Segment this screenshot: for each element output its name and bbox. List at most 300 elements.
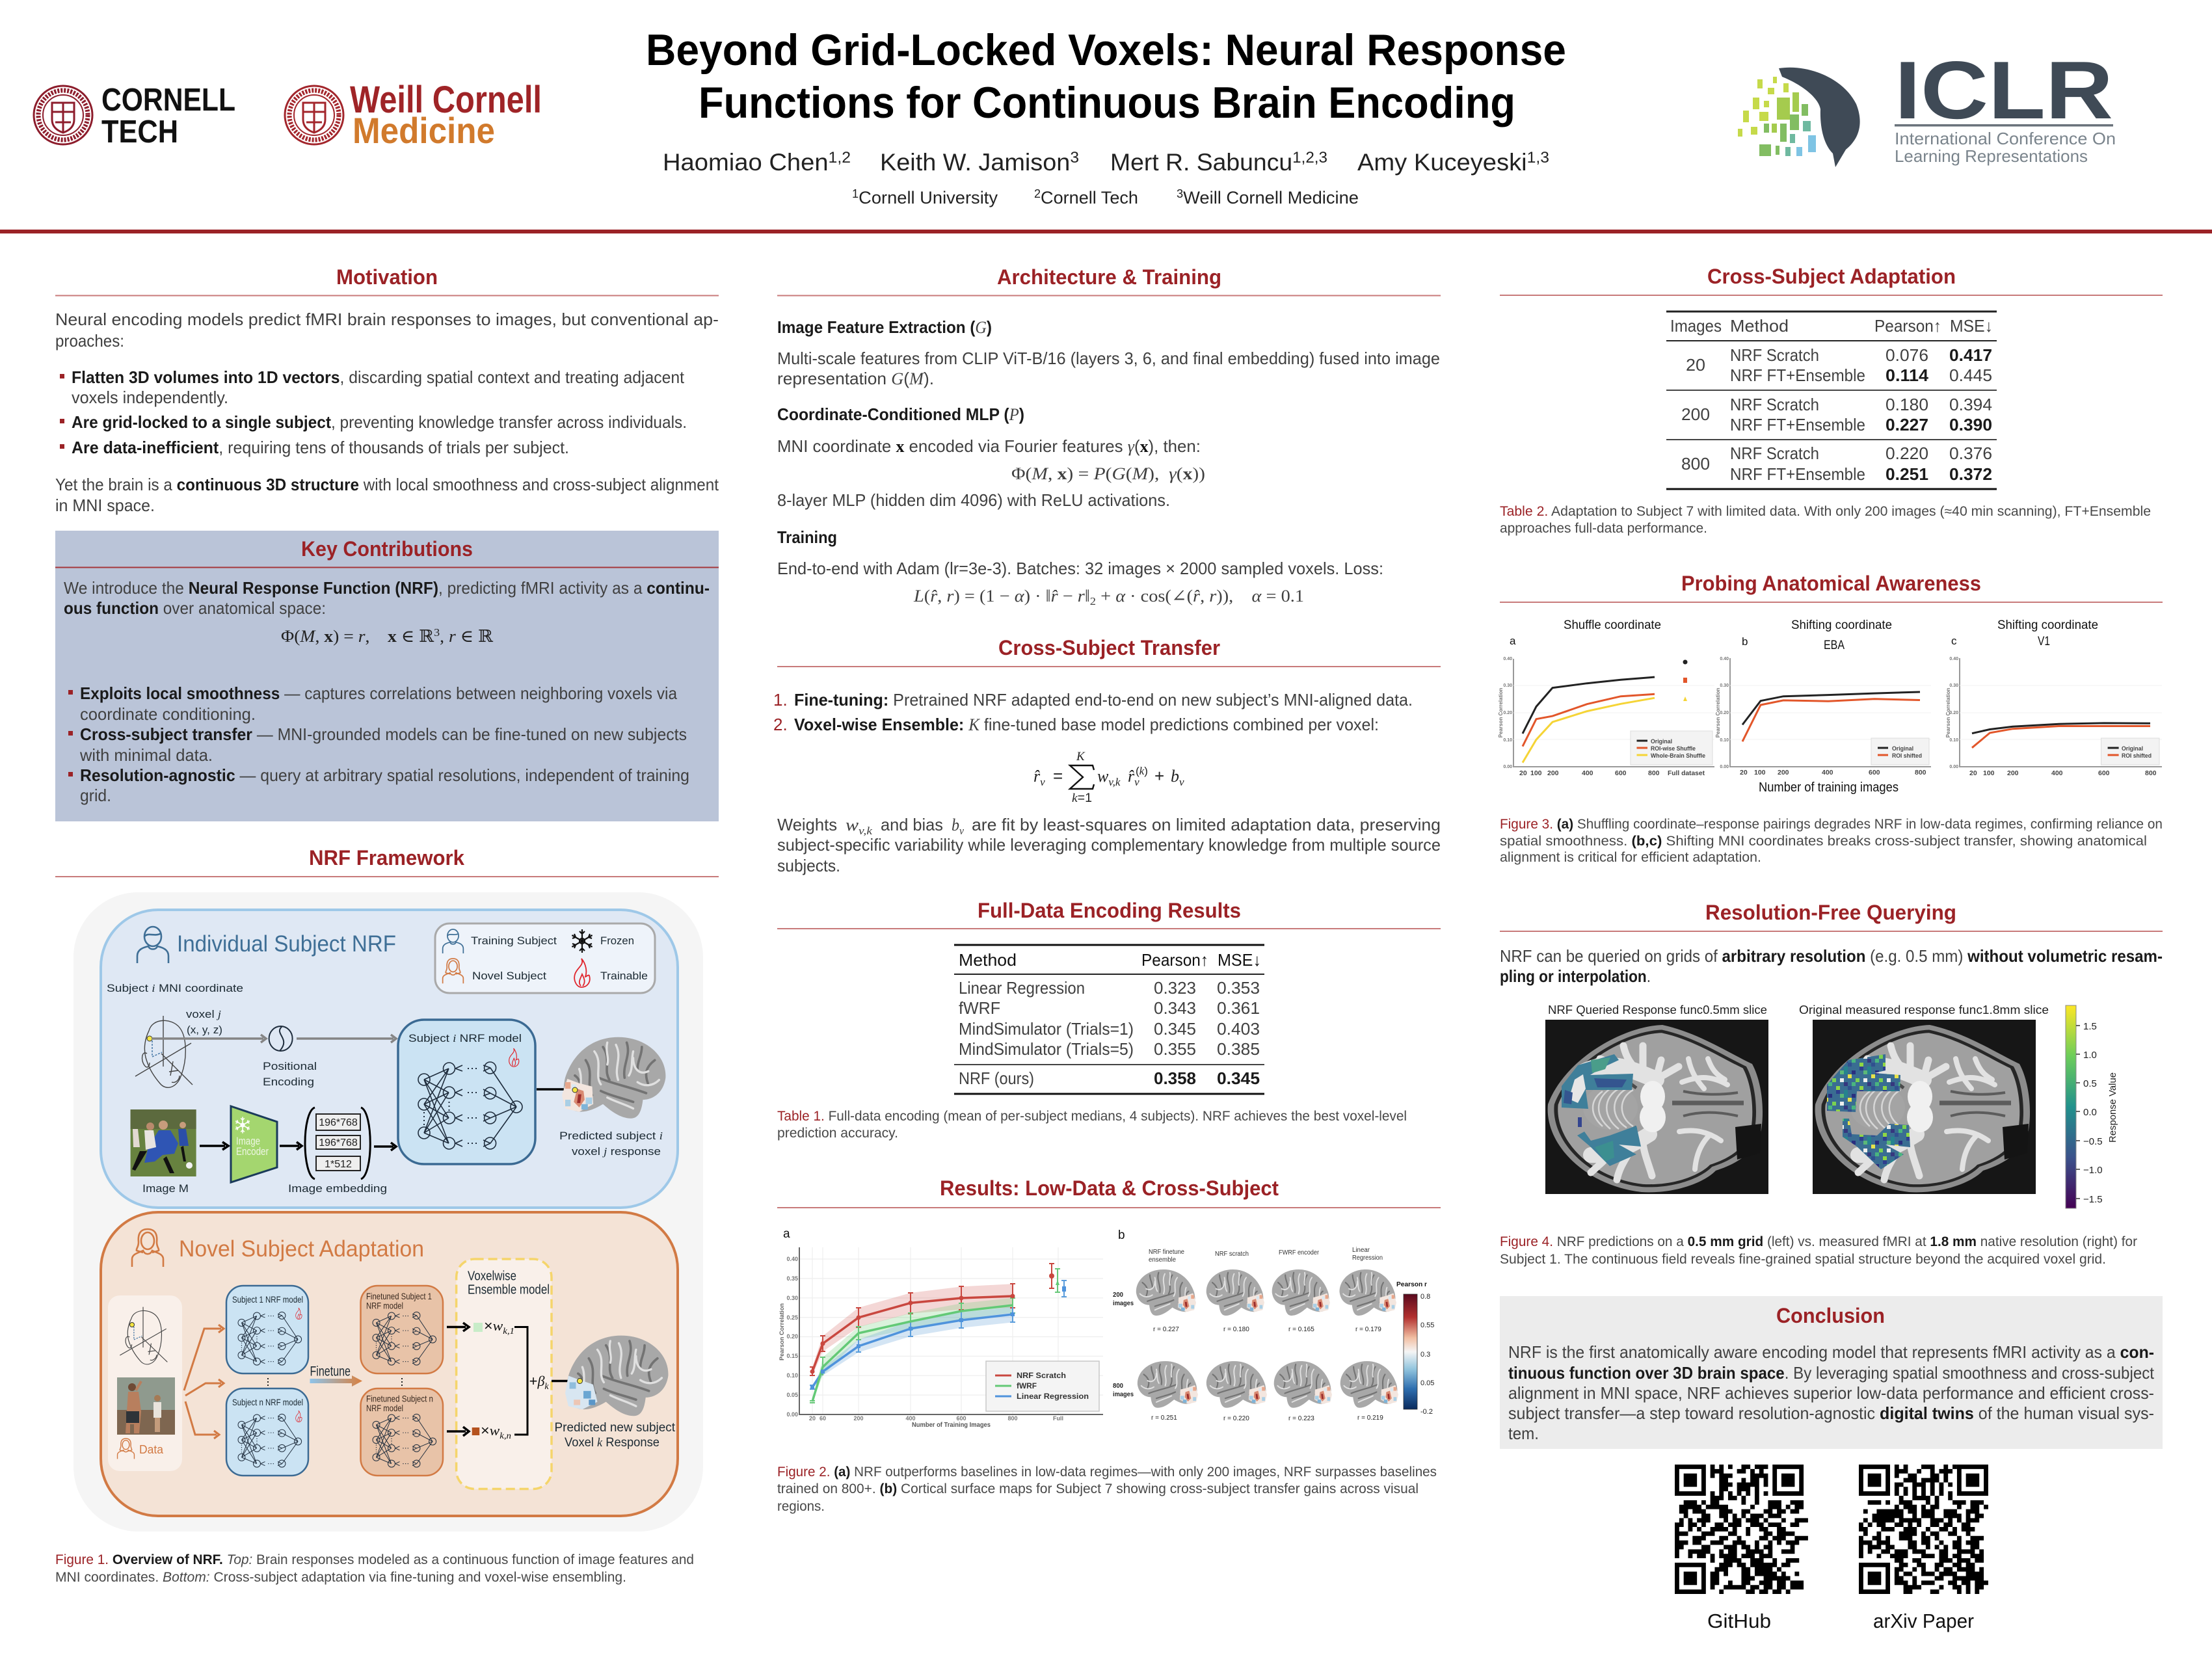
heading: Resolution-Free Querying: Resolution-Free Querying (1705, 901, 1956, 924)
label: predicted response: voxel j response (572, 1145, 661, 1158)
model: finetuned subject n (360, 1388, 443, 1476)
heading: Results: Results: Low-Data & Cross-Subject (940, 1176, 1279, 1200)
text: NRF intro (64, 578, 710, 618)
table 1: 0.385 (1217, 1039, 1260, 1059)
caption: figure 4: Figure 4. NRF predictions on a 0.5 mm grid (left) vs. measured fMRI at 1.8 mm native resolution (right) for (1500, 1234, 2137, 1249)
table 2: NRF Scratch (1730, 345, 1819, 365)
list: contributions: with minimal data. (79, 745, 213, 765)
table 2: NRF FT+Ensemble (1730, 464, 1865, 484)
voxelwise ensemble model: Ensemble model (468, 1282, 550, 1297)
list: contributions: Exploits local smoothness — captures correlations between neighboring voxels via (80, 684, 677, 703)
table 1: MindSimulator (Trials=1) (959, 1019, 1134, 1039)
brain maps: figure 2b: 0.3 (1420, 1351, 1430, 1359)
panel: resolution-free querying (1500, 901, 2163, 1267)
brain maps: figure 2b: FWRF encoder (1279, 1249, 1320, 1256)
icon: image encoder (231, 1106, 277, 1182)
heading: Key Contributions: Key Contributions (301, 537, 473, 561)
label: MNI coordinate: Subject i MNI coordinate (107, 982, 243, 994)
panel: motivation (55, 265, 719, 515)
table 2: 800 (1681, 454, 1710, 473)
text: NRF intro: We introduce the Neural Response Function (NRF), predicting fMRI activity as a continu- (64, 578, 710, 598)
line chart: figure 3a shuffle coordinate: Original (1651, 738, 1672, 745)
icon: image encoder: Encoder (236, 1145, 269, 1158)
caption: table 2: approaches full-data performance. (1500, 521, 1707, 536)
caption: figure 4: Subject 1. The continuous field reveals fine-grained spatial structure beyond the acquired voxel grid. (1500, 1252, 2106, 1267)
table 2: 0.114 (1886, 365, 1929, 385)
label: voxel j (186, 1008, 222, 1036)
legend: Novel Subject (472, 970, 546, 982)
image embedding boxes: 196*768 (319, 1117, 358, 1128)
line chart: figure 3a shuffle coordinate: 600 (1615, 769, 1627, 777)
arrow: image to encoder (200, 1142, 228, 1150)
legend (435, 923, 655, 993)
colorbar: response value: Response Value (2107, 1072, 2118, 1143)
list: contributions: Cross-subject transfer — MNI-grounded models can be fine-tuned on new subjects (80, 724, 687, 744)
text: image feature extraction: Image Feature Extraction (G) (777, 317, 992, 337)
list: limitations: Are data-inefficient, requiring tens of thousands of trials per subject. (72, 438, 569, 457)
text: weights explanation: and bias (881, 815, 943, 834)
formula: voxel-wise ensemble: r̂ (1128, 767, 1134, 786)
table 2: NRF FT+Ensemble (1730, 365, 1865, 385)
text: weights explanation: b (952, 816, 960, 834)
line chart: figure 3c V1: 20 (1969, 769, 1977, 777)
line chart: figure 2a: fWRF (1017, 1381, 1037, 1390)
table 1: NRF (ours) (959, 1068, 1034, 1088)
affiliations: 3 (1177, 187, 1183, 200)
table 1 (954, 944, 1264, 1095)
text: weights explanation (777, 815, 1441, 875)
voxelwise ensemble model: k,n (500, 1431, 511, 1441)
line chart: figure 3c V1: 400 (2051, 769, 2063, 777)
label: voxel j: voxel j (186, 1008, 221, 1020)
line chart: figure 2a: Full (1053, 1415, 1063, 1422)
text: coordinate-conditioned MLP: 8-layer MLP (hidden dim 4096) with ReLU activations. (777, 490, 1170, 510)
table 2: 0.445 (1949, 365, 1992, 385)
line chart: figure 2a: 0.35 (786, 1275, 798, 1282)
formula: voxel-wise ensemble: K (1076, 750, 1086, 763)
diagram: NRF framework figure (73, 892, 703, 1532)
table 2: Pearson↑ (1874, 316, 1941, 336)
line chart: figure 3c V1: 0.30 (1949, 684, 1958, 688)
heading: Cross-Subject Adaptation: Cross-Subject Adaptation (1707, 265, 1956, 288)
image embedding boxes (305, 1108, 370, 1179)
arrow: finetune (310, 1364, 362, 1387)
text: continuous structure (55, 475, 719, 515)
colorbar: response value: −1.5 (2083, 1194, 2103, 1205)
line chart: figure 3b EBA: 0.30 (1720, 684, 1729, 688)
caption: table 2: Table 2. Adaptation to Subject 7 with limited data. With only 200 images (≈40 min scanning), FT+Ensemble (1500, 504, 2151, 519)
voxelwise ensemble model (447, 1259, 552, 1489)
arrow: embedding to model (374, 1143, 396, 1150)
line chart: figure 3a shuffle coordinate: 400 (1582, 769, 1593, 777)
line chart: figure 3b EBA: 400 (1822, 769, 1833, 776)
model: finetuned subject n: NRF model (366, 1403, 403, 1413)
caption: figure 2 (777, 1465, 1437, 1514)
line chart: figure 2a: 0.30 (786, 1295, 798, 1301)
formula: voxel-wise ensemble: v (1179, 776, 1184, 788)
list: transfer steps: 2. (773, 715, 788, 734)
model: finetuned subject 1: NRF model (366, 1301, 403, 1311)
caption: table 2 (1500, 504, 2151, 536)
brain maps: figure 2b: 0.05 (1420, 1379, 1434, 1387)
table 2: 20 (1686, 355, 1705, 375)
line chart: figure 3a shuffle coordinate: 0.30 (1503, 684, 1512, 688)
formula: NRF definition: , (440, 627, 449, 646)
logo: Cornell Tech: CORNELL (101, 83, 235, 118)
caption: figure 2: trained on 800+. (b) Cortical surface maps for Subject 7 showing cross-subject transfer gains across visual (777, 1481, 1419, 1496)
QR code: GitHub: GitHub (1707, 1610, 1771, 1632)
line chart: figure 2a: Number of Training Images (912, 1422, 991, 1429)
table 2: 0.227 (1886, 415, 1928, 434)
line chart: figure 2a: 0.15 (786, 1353, 798, 1359)
brain maps: figure 2b: NRF scratch (1215, 1251, 1249, 1258)
logo: ICLR (1738, 44, 2116, 167)
brain: predicted response (562, 1037, 665, 1119)
model: finetuned subject 1: Finetuned Subject 1 (366, 1291, 432, 1301)
voxelwise ensemble model: ×w (481, 1422, 499, 1439)
table 2: NRF Scratch (1730, 444, 1819, 463)
line chart: figure 3b EBA: 20 (1740, 769, 1748, 776)
text: continuous structure: Yet the brain is a continuous 3D structure with local smoothness and cross-subject alignment (55, 475, 719, 494)
line chart: figure 3b EBA: Number of training images (1759, 780, 1899, 795)
colorbar: response value: −1.0 (2083, 1165, 2103, 1176)
voxelwise ensemble model: k (544, 1382, 549, 1392)
brain maps: figure 2b (1113, 1228, 1434, 1422)
arrows: data to models (184, 1325, 224, 1439)
list: transfer steps: Fine-tuning: Pretrained NRF adapted end-to-end on new subject’s MNI-aligned data. (794, 690, 1413, 710)
authors: Keith W. Jamison (880, 149, 1066, 176)
line chart: figure 2a: 0.25 (786, 1314, 798, 1321)
formula: NRF definition: 3 (434, 626, 440, 639)
arrow: to positional encoding (152, 1035, 266, 1042)
caption: figure 2: Figure 2. (a) NRF outperforms baselines in low-data regimes—with only 200 images, NRF surpasses baselines (777, 1465, 1437, 1480)
line chart: figure 3b EBA: 0.40 (1720, 657, 1729, 661)
header rule (0, 230, 2212, 233)
data panel (108, 1295, 182, 1471)
text: conclusion body: tem. (1508, 1424, 1539, 1443)
table 1: MindSimulator (Trials=5) (959, 1039, 1134, 1059)
text: training (777, 527, 1383, 607)
label: predicted response: Predicted subject i (559, 1130, 663, 1142)
icon: novel subject person (132, 1229, 163, 1267)
brain: new subject response (565, 1336, 668, 1416)
table 1: 0.353 (1217, 978, 1260, 998)
table 2: 0.417 (1949, 345, 1992, 365)
panel: architecture and training (777, 265, 1441, 607)
label: positional encoding: Encoding (263, 1076, 314, 1088)
heading: Individual Subject NRF: Individual Subject NRF (177, 931, 396, 957)
brain slice: original measured response: Original measured response func1.8mm slice (1799, 1003, 2049, 1016)
line chart: figure 3c V1: ROI shifted (2122, 752, 2152, 759)
colorbar: response value (2066, 1005, 2118, 1208)
brain maps: figure 2b: 200 (1113, 1292, 1123, 1299)
line chart: figure 2a: 0.40 (786, 1256, 798, 1262)
voxelwise ensemble model: Voxelwise (468, 1269, 516, 1284)
text: conclusion body (1508, 1342, 2155, 1443)
line chart: figure 3b EBA: ROI shifted (1892, 752, 1922, 759)
line chart: figure 2a: 200 (853, 1415, 864, 1422)
list: limitations: Are grid-locked to a single subject, preventing knowledge transfer across individuals. (72, 412, 687, 432)
text: coordinate-conditioned MLP (777, 405, 1205, 510)
line chart: figure 2a: 0.00 (786, 1411, 798, 1418)
brain maps: figure 2b: images (1113, 1300, 1134, 1307)
caption: figure 1: Figure 1. Overview of NRF. Top: Brain responses modeled as a continuous function of image features and (55, 1552, 694, 1567)
line chart: figure 3c V1: Original (2122, 745, 2143, 752)
panel: full-data encoding results (777, 899, 1441, 1141)
table 2: NRF FT+Ensemble (1730, 415, 1865, 434)
colorbar: response value: 1.5 (2083, 1021, 2097, 1032)
heading: Novel Subject Adaptation: Novel Subject Adaptation (179, 1236, 424, 1262)
authors (663, 149, 1549, 176)
data panel: Data (139, 1443, 164, 1456)
brain maps: figure 2b: r = 0.179 (1355, 1326, 1381, 1333)
affiliations: 2 (1034, 187, 1041, 200)
legend: Training Subject (471, 935, 557, 947)
label: Image embedding: Image embedding (288, 1182, 387, 1195)
affiliations: Cornell University (859, 188, 998, 207)
caption: figure 1: MNI coordinates. Bottom: Cross-subject adaptation via fine-tuning and voxel-wise ensembling. (55, 1570, 626, 1585)
text: coordinate-conditioned MLP: MNI coordinate x encoded via Fourier features γ(x), then: (777, 436, 1201, 456)
text: training: L(r̂, r) = (1 − α) · ‖r̂ − r‖ (914, 587, 1089, 605)
caption: table 1: prediction accuracy. (777, 1126, 898, 1141)
line chart: figure 3b EBA: Original (1892, 745, 1913, 752)
formula: voxel-wise ensemble: v (1134, 776, 1139, 788)
table 1: 0.343 (1154, 998, 1196, 1018)
brain maps: figure 2b: Regression (1352, 1254, 1383, 1262)
table 1: Linear Regression (959, 978, 1085, 998)
brain maps: figure 2b: Pearson r (1396, 1281, 1427, 1288)
table 2: Images (1670, 316, 1722, 336)
brain maps: figure 2b: r = 0.251 (1151, 1414, 1177, 1422)
table 2: 0.390 (1949, 415, 1992, 434)
line chart: figure 3c V1: 200 (2007, 769, 2019, 777)
line chart: figure 3c V1: c (1951, 635, 1957, 647)
table 2: 0.394 (1949, 395, 1992, 414)
heading: Probing Anatomical Awareness: Probing Anatomical Awareness (1681, 572, 1981, 595)
panel: individual subject NRF (101, 910, 678, 1208)
logo: Weill Cornell Medicine: Weill Cornell (350, 79, 542, 121)
line chart: figure 3a shuffle coordinate: 100 (1530, 769, 1542, 777)
brain maps: figure 2b: r = 0.165 (1288, 1326, 1314, 1333)
table 2: 0.251 (1886, 464, 1928, 484)
logo: ICLR: International Conference On (1895, 129, 2116, 148)
line chart: figure 3b EBA: 0.10 (1720, 738, 1729, 743)
text: motivation intro: proaches: (55, 331, 124, 351)
text: weights explanation: v,k (859, 825, 873, 837)
formula: voxel-wise ensemble (1033, 750, 1184, 805)
line chart: figure 3b EBA: b (1742, 635, 1748, 648)
colorbar: response value: 0.0 (2083, 1107, 2097, 1118)
line chart: figure 2a: Linear Regression (1017, 1392, 1089, 1401)
line chart: figure 3c V1: 800 (2145, 769, 2157, 777)
icon: positional encoding (269, 1026, 293, 1051)
list: transfer steps: Voxel-wise Ensemble: K fine-tuned base model predictions combined per voxel: (794, 715, 1379, 734)
brain maps: figure 2b: -0.2 (1420, 1408, 1433, 1416)
brain slice: original measured response (1799, 1003, 2049, 1194)
text: weights explanation: Weights (777, 815, 837, 834)
text: querying intro (1500, 946, 2163, 986)
brain maps: figure 2b: 0.8 (1420, 1293, 1430, 1301)
formula: voxel-wise ensemble: r̂ (1033, 767, 1040, 786)
line chart: figure 2a: Pearson Correlation (779, 1303, 785, 1360)
brain maps: figure 2b: ensemble (1149, 1256, 1176, 1264)
line chart: figure 3a shuffle coordinate (1498, 618, 1714, 777)
heading: Motivation: Motivation (336, 265, 438, 289)
line chart: figure 2a: 20 (809, 1415, 816, 1422)
icon: image encoder: Image (236, 1135, 260, 1147)
QR code: GitHub (1675, 1465, 1808, 1632)
table 1: 0.323 (1154, 978, 1196, 998)
model: subject n NRF: Subject n NRF model (232, 1397, 303, 1407)
line chart: figure 3c V1: V1 (2038, 635, 2050, 648)
logo: Cornell Tech: TECH (101, 114, 178, 150)
formula: voxel-wise ensemble: (k) (1136, 765, 1148, 777)
table 2: 0.180 (1886, 395, 1928, 414)
line chart: figure 3a shuffle coordinate: 20 (1519, 769, 1527, 777)
logo: Weill Cornell Medicine (285, 79, 542, 151)
formula: voxel-wise ensemble: = (1053, 766, 1063, 786)
line chart: figure 3b EBA (1715, 618, 1931, 795)
table 1: MSE↓ (1218, 950, 1261, 970)
colorbar: response value: −0.5 (2083, 1136, 2103, 1147)
line chart: figure 3b EBA: Pearson Correlation (1715, 688, 1721, 737)
authors: Haomiao Chen (663, 149, 823, 176)
line chart: figure 3c V1: 100 (1983, 769, 1995, 777)
brain maps: figure 2b: images (1113, 1391, 1134, 1398)
panel: subject i NRF model (398, 1020, 535, 1164)
QR code: arXiv paper: arXiv Paper (1873, 1610, 1974, 1632)
text: weights explanation: subjects. (777, 856, 840, 875)
formula: NRF definition: r ∈ ℝ (449, 627, 491, 646)
text: conclusion body: alignment in MNI space, NRF achieves superior low-data performance and efficient cross- (1508, 1383, 2154, 1403)
table 1: 0.361 (1217, 998, 1260, 1018)
text: weights explanation: subject-specific variability while leveraging complementary knowledge from multiple source (777, 835, 1441, 855)
line chart: figure 3c V1 (1945, 618, 2162, 777)
line chart: figure 3b EBA: 100 (1754, 769, 1766, 776)
text: motivation intro: Neural encoding models predict fMRI brain responses to images, but conventional ap- (55, 310, 719, 329)
table 2: NRF Scratch (1730, 395, 1819, 414)
table 2: MSE↓ (1950, 316, 1993, 336)
table 2 (1666, 311, 1997, 490)
table 2: 0.220 (1886, 444, 1928, 463)
line chart: figure 3b EBA: 200 (1778, 769, 1789, 776)
caption: figure 4 (1500, 1234, 2137, 1267)
caption: figure 3: spatial smoothness. (b,c) Shifting MNI coordinates breaks cross-subject transfer, showing anatomical (1500, 834, 2147, 849)
text: weights explanation: v (959, 825, 964, 837)
brain slice: NRF queried response: NRF Queried Response func0.5mm slice (1548, 1003, 1767, 1016)
line chart: figure 3c V1: Pearson Correlation (1945, 688, 1951, 737)
logo: ICLR: Learning Representations (1895, 146, 2088, 166)
text: conclusion body: NRF is the first anatomically aware encoding model that represents fMRI activity as a con- (1508, 1342, 2154, 1362)
line chart: figure 3a shuffle coordinate: Full dataset (1668, 769, 1705, 777)
formula: voxel-wise ensemble: v,k (1108, 776, 1121, 788)
title: Functions for Continuous Brain Encoding (699, 78, 1515, 127)
table 2: 0.372 (1949, 464, 1992, 484)
brain maps: figure 2b: 800 (1113, 1383, 1123, 1390)
table 1: 0.355 (1154, 1039, 1196, 1059)
legend: Frozen (600, 935, 634, 947)
label: voxel j: (x, y, z) (187, 1024, 222, 1036)
line chart: figure 3c V1: 0.20 (1949, 711, 1958, 715)
line chart: figure 2a (779, 1227, 1103, 1429)
logo: ICLR: ICLR (1895, 44, 2113, 136)
formula: voxel-wise ensemble: v (1040, 776, 1045, 788)
affiliations: 1 (852, 187, 859, 200)
icon: head with voxel (135, 1016, 193, 1087)
line chart: figure 3b EBA: 0.00 (1720, 765, 1729, 769)
text: image feature extraction: representation G(M). (777, 369, 934, 388)
text: image feature extraction (777, 317, 1440, 388)
line chart: figure 3a shuffle coordinate: a (1510, 635, 1516, 647)
authors: Mert R. Sabuncu (1110, 149, 1291, 176)
panel: subject i NRF model: Subject i NRF model (408, 1032, 522, 1044)
caption: figure 1 (55, 1552, 694, 1585)
line chart: figure 3a shuffle coordinate: 800 (1648, 769, 1660, 777)
line chart: figure 3a shuffle coordinate: Pearson Correlation (1498, 688, 1504, 737)
line chart: figure 3b EBA: 800 (1915, 769, 1926, 776)
line chart: figure 2a: 800 (1007, 1415, 1018, 1422)
text: querying intro: pling or interpolation. (1500, 966, 1651, 986)
brain slice: NRF queried response (1545, 1003, 1768, 1194)
table 2: 0.076 (1886, 345, 1928, 365)
caption: figure 3: alignment is critical for efficient adaptation. (1500, 850, 1761, 865)
line chart: figure 3b EBA: 0.20 (1720, 711, 1729, 715)
voxelwise ensemble model: ×w (484, 1318, 502, 1334)
label: predicted response (559, 1130, 663, 1158)
label: predicted new subject: Voxel k Response (565, 1436, 660, 1450)
label: predicted new subject: Predicted new subject (554, 1421, 676, 1435)
arrow: finetune: Finetune (310, 1364, 351, 1379)
line chart: figure 3c V1: Shifting coordinate (1997, 618, 2098, 632)
model: subject n NRF (226, 1388, 308, 1476)
formula: NRF definition: Φ(M, x) = r, x ∈ ℝ (281, 627, 432, 646)
voxelwise ensemble model: +β (529, 1373, 544, 1389)
list: transfer steps: 1. (773, 690, 788, 710)
text: coordinate-conditioned MLP: Φ(M, x) = P(G(M), γ(x)) (1011, 464, 1205, 483)
line chart: figure 3a shuffle coordinate: Shuffle coordinate (1564, 618, 1661, 632)
panel: results low-data and cross-subject (777, 1176, 1441, 1514)
caption: figure 3 (1500, 817, 2163, 865)
authors: 1,2,3 (1292, 149, 1327, 166)
icon: training subject person (137, 927, 168, 963)
list: limitations (60, 367, 687, 457)
list: limitations: Flatten 3D volumes into 1D vectors, discarding spatial context and treating adjacent (72, 367, 685, 387)
line chart: figure 2a: 0.10 (786, 1372, 798, 1379)
brain maps: figure 2b: r = 0.223 (1288, 1415, 1314, 1422)
line chart: figure 3c V1: 600 (2098, 769, 2110, 777)
formula: voxel-wise ensemble: w (1097, 767, 1108, 786)
label: positional encoding (263, 1060, 317, 1088)
text: coordinate-conditioned MLP: Coordinate-Conditioned MLP (P) (777, 405, 1024, 424)
line chart: figure 2a: 0.05 (786, 1392, 798, 1398)
panel: cross-subject transfer (773, 636, 1441, 875)
formula: voxel-wise ensemble: k=1 (1072, 791, 1092, 805)
title (646, 25, 1566, 127)
brain maps: figure 2b: r = 0.227 (1153, 1326, 1179, 1333)
arrow: to NRF model (297, 1035, 396, 1042)
image embedding boxes: 1*512 (325, 1159, 352, 1170)
line chart: figure 3a shuffle coordinate: 0.00 (1503, 765, 1512, 769)
list: transfer steps (773, 690, 1413, 734)
line chart: figure 3c V1: 0.00 (1949, 765, 1958, 769)
voxelwise ensemble model: k,1 (503, 1327, 514, 1336)
line chart: figure 3a shuffle coordinate: ROI-wise Shuffle (1651, 745, 1696, 752)
formula: voxel-wise ensemble: b (1171, 767, 1179, 786)
text: image feature extraction: Multi-scale features from CLIP ViT-B/16 (layers 3, 6, and final embedding) fused into image (777, 349, 1440, 368)
heading: Cross-Subject Transfer: Cross-Subject Transfer (998, 636, 1220, 659)
brain maps: figure 2b: r = 0.180 (1223, 1326, 1249, 1333)
line chart: figure 3b EBA: EBA (1824, 639, 1845, 652)
